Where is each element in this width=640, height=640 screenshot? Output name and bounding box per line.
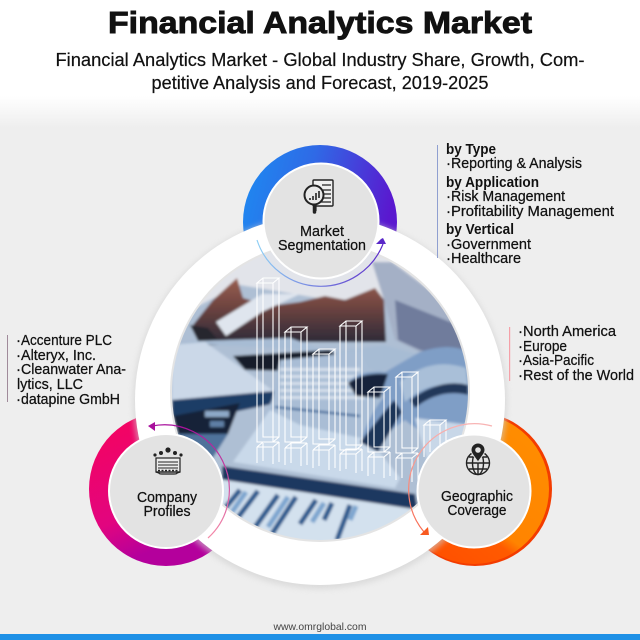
text block: company list: lytics, LLC — [17, 376, 83, 393]
text block: regions: · — [518, 338, 523, 355]
icon: boardroom table — [153, 447, 183, 474]
panel: geographic coverage — [418, 434, 530, 548]
text block: regions: · — [518, 323, 523, 340]
text block: market segmentation details: · — [446, 250, 451, 267]
text block: market segmentation details: by Application — [446, 175, 539, 191]
lower paper — [222, 478, 414, 540]
text block: company list: · — [16, 347, 21, 364]
subtitle: Financial Analytics Market - Global Industry Share, Growth, Com- — [56, 50, 584, 70]
arrow: geographic coverage — [409, 424, 492, 535]
text block: market segmentation details: · — [446, 155, 451, 172]
text block: market segmentation details: Risk Management — [451, 188, 566, 205]
icon: globe with pin — [466, 443, 490, 474]
label — [278, 223, 366, 254]
website footer: www.omrglobal.com — [273, 621, 367, 633]
label: Company — [137, 489, 197, 506]
label: Profiles — [144, 503, 190, 520]
label: Coverage — [448, 502, 506, 519]
text block: market segmentation details — [437, 142, 615, 267]
bar 2 — [285, 327, 307, 466]
navy laptop edge — [222, 466, 418, 512]
text block: regions: North America — [523, 323, 617, 340]
dark wedge — [233, 350, 340, 371]
ring: geographic coverage — [398, 412, 552, 566]
label — [441, 488, 513, 519]
label — [137, 489, 197, 520]
text block: market segmentation details: Profitability Management — [451, 203, 615, 220]
left laptop — [172, 342, 275, 406]
text block: regions — [509, 323, 634, 384]
text block: market segmentation details: · — [446, 236, 451, 253]
laptop wedge — [233, 410, 400, 488]
panel: company profiles — [109, 434, 223, 548]
arrow: company profiles — [148, 422, 229, 538]
text block: market segmentation details: Government — [451, 236, 532, 253]
text block: company list: Alteryx, Inc. — [21, 347, 96, 364]
central photo — [172, 260, 468, 540]
text block: company list: · — [16, 332, 21, 349]
bar 3 — [313, 349, 335, 470]
text block: company list: · — [16, 391, 21, 408]
text block: market segmentation details: · — [446, 203, 451, 220]
text block: regions: Europe — [523, 338, 567, 355]
text block: regions: · — [518, 367, 523, 384]
striped paper — [268, 352, 340, 406]
text block: company list — [7, 332, 126, 408]
3D bar chart overlay — [257, 278, 446, 482]
text block: regions: Rest of the World — [523, 367, 634, 384]
label: Segmentation — [278, 237, 366, 254]
subtitle — [56, 50, 584, 93]
text block: market segmentation details: · — [446, 188, 451, 205]
icon: magnifier over report — [304, 180, 333, 212]
text block: market segmentation details: Reporting & Analysis — [451, 155, 582, 172]
central white ring — [133, 215, 507, 589]
arrow: market segmentation — [257, 238, 386, 286]
text block: market segmentation details: by Type — [446, 142, 496, 158]
bar 1 — [257, 278, 279, 464]
bar 6 — [396, 372, 418, 482]
panel: market segmentation — [264, 164, 378, 278]
text block: company list: · — [16, 361, 21, 378]
text block: regions: Asia-Pacific — [523, 352, 594, 369]
bar 4 — [340, 321, 362, 473]
text block: market segmentation details: Healthcare — [451, 250, 521, 267]
label: Geographic — [441, 488, 513, 505]
upper background — [200, 252, 426, 306]
ring: market segmentation — [243, 145, 397, 299]
text block: market segmentation details: by Vertical — [446, 222, 514, 238]
bottom bar — [0, 634, 640, 640]
lower left — [178, 432, 228, 458]
brown sleeve band — [193, 278, 386, 342]
label: Market — [300, 223, 345, 240]
ring: company profiles — [89, 412, 243, 566]
text block: company list: Accenture PLC — [21, 332, 112, 349]
bar 5 — [368, 387, 390, 478]
text block: company list: datapine GmbH — [21, 391, 120, 408]
pen hand — [216, 294, 300, 336]
title: Financial Analytics Market — [108, 5, 532, 40]
hand — [350, 347, 472, 440]
bar 7 — [424, 420, 446, 457]
text block: company list: Cleanwater Ana- — [21, 361, 126, 378]
text block: regions: · — [518, 352, 523, 369]
subtitle: petitive Analysis and Forecast, 2019-2025 — [152, 73, 488, 93]
